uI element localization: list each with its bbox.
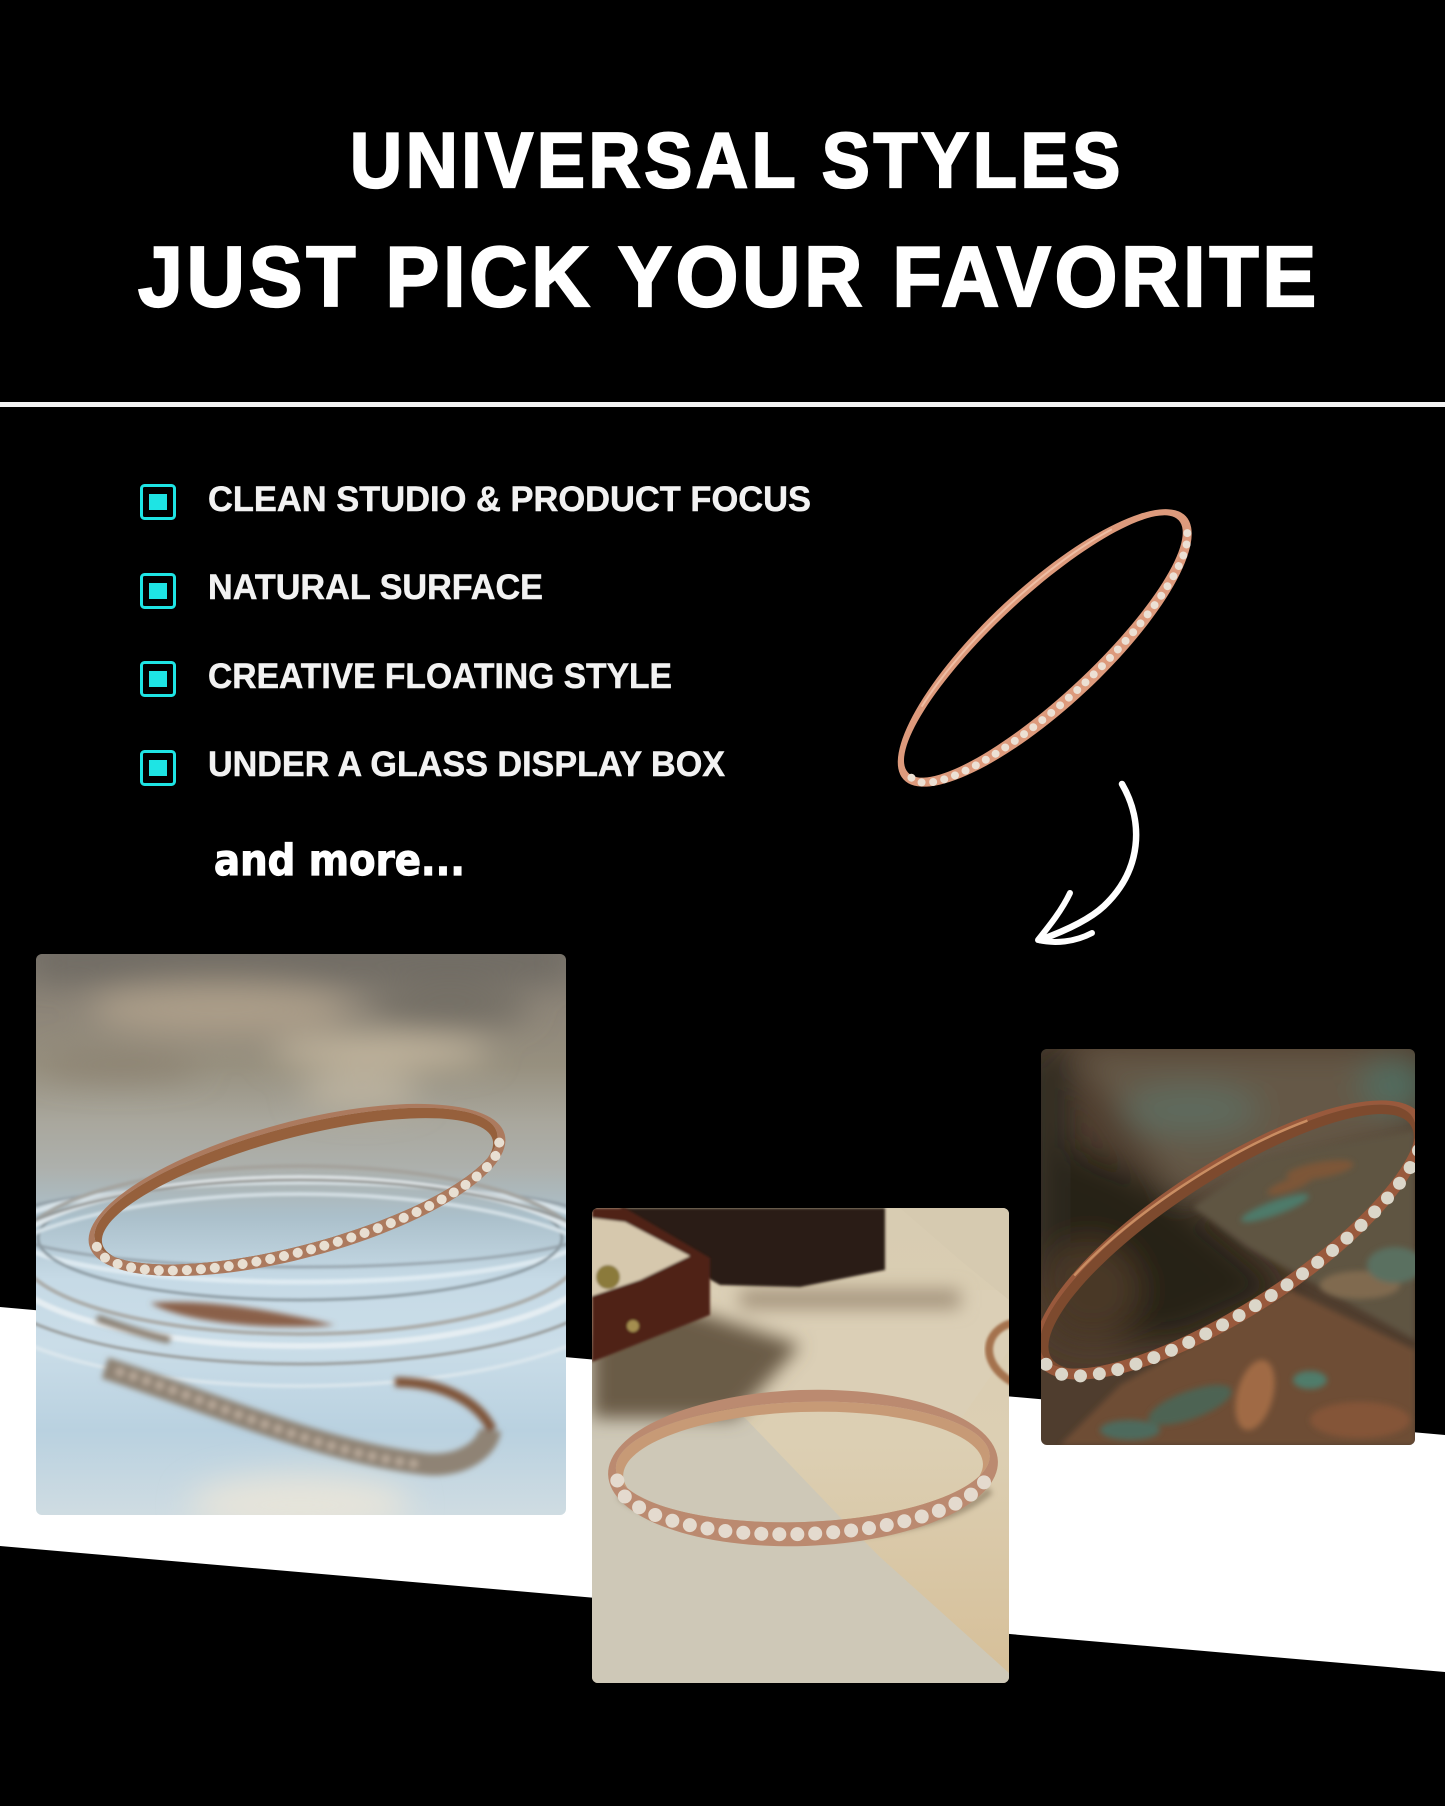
lower copper mound (1060, 1290, 1415, 1445)
water ripples (36, 1164, 566, 1388)
list item 1: CLEAN STUDIO & PRODUCT FOCUS (208, 479, 811, 519)
list item 3: CREATIVE FLOATING STYLE (208, 656, 672, 696)
feature list (142, 479, 811, 784)
icon: rose gold bangle (863, 472, 1227, 823)
box shadow (592, 1290, 960, 1418)
arrow (1038, 784, 1136, 942)
title: UNIVERSAL STYLES (350, 116, 1124, 204)
title (138, 116, 1320, 325)
blurred background tones (36, 950, 566, 1535)
red leather box (592, 1208, 710, 1362)
upper copper ledge (1193, 1130, 1415, 1340)
photo: bangle on linen and paper (592, 1208, 1012, 1683)
bangle (605, 1383, 1001, 1553)
photo: bangle floating over water ripples (36, 954, 566, 1515)
linen cloth (592, 1412, 1009, 1683)
bangle (88, 1104, 506, 1276)
white diagonal band (0, 1307, 1445, 1672)
title: JUST PICK YOUR FAVORITE (138, 230, 1320, 325)
second ring (989, 1323, 1012, 1382)
photo: bangle on patinated copper (1041, 1049, 1415, 1445)
list item 4: UNDER A GLASS DISPLAY BOX (208, 744, 725, 784)
bangle reflection (97, 1302, 492, 1465)
upper paper (663, 1290, 1009, 1420)
bangle shadow (620, 1490, 990, 1536)
and more text: and more... (214, 836, 465, 886)
dark jewellery box (620, 1208, 885, 1287)
bangle (1041, 1100, 1415, 1382)
blurred background tones (1030, 1049, 1430, 1340)
list item 2: NATURAL SURFACE (208, 567, 543, 607)
